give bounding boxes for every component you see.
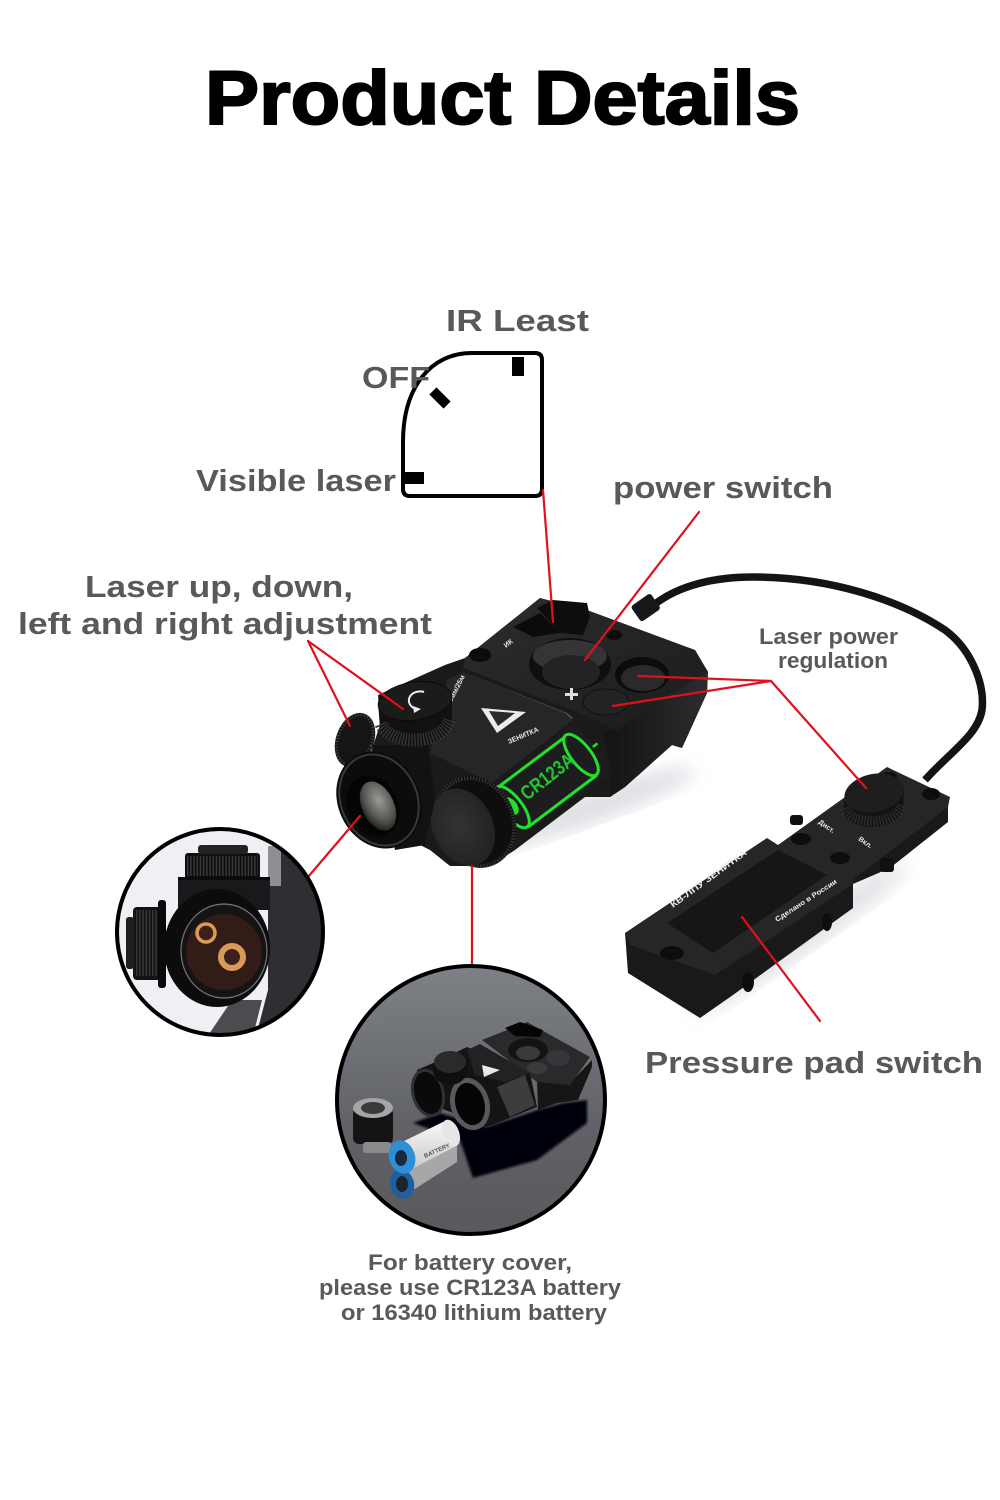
green battery overlay	[489, 729, 604, 833]
top knob	[185, 853, 260, 879]
lower strut	[210, 1000, 262, 1033]
title: Product Details	[205, 56, 800, 141]
remote knob	[841, 768, 907, 827]
inset: battery compartment	[337, 966, 605, 1234]
remote screws	[660, 772, 940, 992]
left knob	[133, 907, 158, 980]
silhouette	[365, 598, 708, 866]
remote top face	[625, 767, 950, 975]
battery tube	[497, 723, 607, 830]
inset: battery compartment: BATTERY	[423, 1143, 451, 1160]
laser warning: 15мм/25м	[446, 674, 467, 707]
screws and plus mark	[469, 630, 622, 700]
inset: front aperture	[117, 829, 335, 1040]
pressure pad remote	[625, 767, 950, 1026]
label: laser adjustment	[18, 569, 432, 641]
front panel	[430, 672, 573, 783]
marking: IK: ИК	[503, 638, 515, 650]
reflection	[413, 1100, 587, 1178]
callout lines	[308, 490, 866, 1021]
caption: battery note: or 16340 lithium battery	[341, 1300, 608, 1325]
caption: battery note: For battery cover,	[368, 1250, 572, 1275]
laser warning: ЗЕНИТКА	[507, 727, 540, 746]
ring cap	[353, 1108, 393, 1144]
front housing	[413, 1047, 537, 1127]
shadow	[684, 850, 916, 1026]
side pins	[790, 815, 894, 872]
remote markings: Дист.	[817, 819, 836, 835]
shadow	[481, 755, 699, 861]
diagram: selector switch positions	[403, 353, 542, 496]
label: laser power regulation: regulation	[778, 648, 888, 673]
remote side faces	[625, 797, 948, 1018]
green battery overlay: CR123A	[517, 749, 579, 805]
power button lower	[583, 689, 629, 715]
top adjustment knob	[376, 677, 454, 746]
right plate	[258, 852, 321, 1026]
main laser unit	[321, 593, 708, 882]
cable	[655, 577, 982, 780]
label: power switch: power switch	[613, 470, 833, 505]
pressure pad remote: Сделано в России	[774, 879, 838, 924]
label: laser power regulation: Laser power	[759, 624, 898, 649]
label: laser power regulation	[759, 624, 898, 673]
power button upper	[615, 657, 669, 693]
pressure pad remote: Вкл.	[857, 836, 873, 850]
side knob	[328, 707, 382, 773]
knob	[433, 1072, 464, 1084]
label: Visible laser: Visible laser	[196, 463, 396, 498]
battery	[404, 1121, 458, 1168]
label: Pressure pad switch: Pressure pad switch	[645, 1045, 983, 1080]
laser warning	[446, 674, 540, 746]
pressure pad	[667, 850, 827, 953]
caption: battery note	[319, 1250, 622, 1325]
pressure pad remote: КВ-ЛПУ ЗЕНИТКА	[668, 847, 749, 910]
label: IR Least: IR Least	[446, 303, 589, 338]
battery cap	[419, 762, 531, 882]
top plate	[482, 1022, 590, 1085]
rear housing	[537, 1060, 592, 1110]
power switch button	[529, 638, 611, 690]
label: laser adjustment: left and right adjustment	[18, 606, 432, 641]
lens housing	[321, 737, 437, 863]
top plate	[463, 598, 708, 730]
label: OFF: OFF	[362, 360, 430, 395]
label: laser adjustment: Laser up, down,	[85, 569, 353, 604]
lenses	[410, 1069, 446, 1117]
connector	[630, 593, 661, 622]
battery polarity marks	[489, 742, 598, 826]
slide switch	[513, 600, 590, 637]
plate groove highlight	[452, 672, 573, 722]
copper contacts	[197, 924, 215, 942]
rear housing side	[603, 672, 708, 797]
caption: battery note: please use CR123A battery	[319, 1275, 622, 1300]
aperture body	[164, 889, 270, 1007]
upper body	[178, 878, 270, 910]
battery tube opening	[497, 1075, 535, 1117]
battery reflection	[408, 1146, 457, 1190]
